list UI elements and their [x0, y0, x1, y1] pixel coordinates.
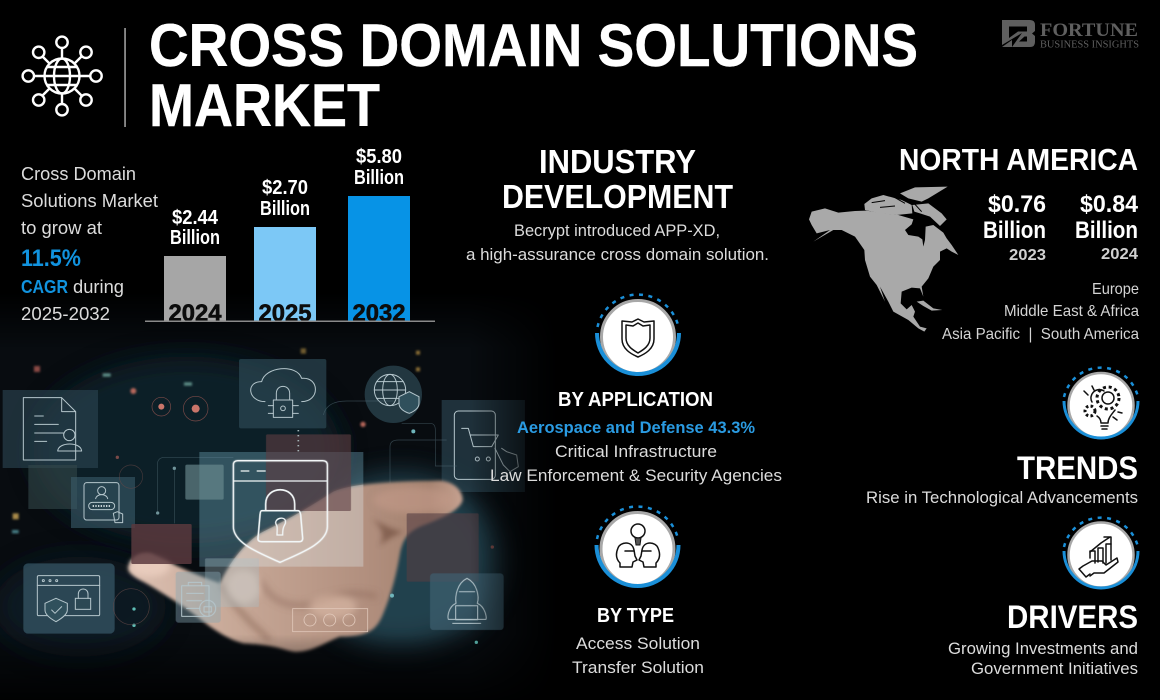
text block: by type: Transfer Solution: [572, 659, 704, 677]
heading: industry development: DEVELOPMENT: [502, 178, 733, 215]
heading: industry development: INDUSTRY: [539, 143, 696, 180]
bar 2025: $2.70: [262, 177, 308, 199]
header divider: [124, 28, 126, 127]
stat: 2023 value: 2023: [1009, 247, 1046, 264]
stat: 2024 value: $0.84: [1080, 191, 1139, 218]
bar 2025: 2025: [258, 300, 312, 327]
panel: browser shield lock: [23, 563, 115, 634]
panel: document: [3, 390, 98, 468]
stat: 2023 value: [983, 191, 1046, 264]
text block: by type: Access Solution: [576, 635, 700, 653]
text block: by application: [490, 389, 782, 485]
heading: north america: NORTH AMERICA: [899, 142, 1138, 177]
text block: other regions: [942, 281, 1139, 343]
heading: industry development: a high-assurance cross domain solution.: [466, 246, 769, 264]
bar 2024: Billion: [170, 227, 220, 249]
bar 2032: 2032: [352, 300, 406, 327]
panel: hacker: [430, 573, 504, 630]
text block: by type: BY TYPE: [597, 605, 674, 627]
title: MARKET: [149, 72, 380, 139]
bar 2024: [164, 207, 226, 327]
bar 2032: $5.80: [356, 146, 402, 168]
text block: trends: Rise in Technological Advancements: [866, 489, 1138, 507]
text block: by application: Critical Infrastructure: [555, 443, 717, 461]
stat: 2023 value: $0.76: [988, 191, 1046, 218]
panel: cloud lock: [239, 359, 326, 428]
text block: market growth: Cross Domain: [21, 163, 136, 184]
text block: trends: [866, 450, 1138, 507]
stat: 2023 value: Billion: [983, 217, 1046, 244]
text block: drivers: Growing Investments and: [948, 640, 1138, 658]
icon: drivers hand and chart: [1064, 518, 1138, 588]
panel: checklist lock: [176, 572, 221, 623]
translucent veil on hand: [229, 484, 364, 567]
text block: other regions: Middle East & Africa: [1004, 303, 1139, 320]
connector lines: [157, 401, 457, 523]
panel: mobile shopping: [442, 400, 525, 492]
logo: Fortune Business Insights: FORTUNE: [1040, 21, 1138, 41]
title: CROSS DOMAIN SOLUTIONS: [149, 12, 918, 79]
text block: other regions: Europe: [1092, 281, 1139, 298]
panel: globe shield: [365, 366, 422, 423]
icon: glowing shield with padlock: [233, 461, 327, 562]
text block: market growth: [21, 163, 158, 324]
panel: large translucent shield backing: [199, 452, 363, 567]
heading: industry development: [466, 143, 769, 264]
panel: power buttons: [293, 609, 368, 632]
indicator dots: [12, 348, 494, 644]
stat: 2024 value: Billion: [1075, 217, 1138, 244]
bar 2032: Billion: [354, 167, 404, 189]
icon: by type heads and bulb: [596, 507, 678, 586]
text block: market growth: 2025-2032: [21, 303, 110, 324]
bar chart: [145, 146, 435, 327]
logo: Fortune Business Insights: BUSINESS INSIGHTS: [1040, 40, 1139, 50]
bar 2025: [254, 177, 316, 327]
stat: 2024 value: [1075, 191, 1139, 263]
text block: market growth: to grow at: [21, 217, 102, 238]
text block: market growth: 11.5%: [21, 245, 81, 272]
map: North America: [809, 187, 958, 332]
text block: market growth: during: [73, 276, 124, 297]
bar 2032: [348, 146, 410, 327]
text block: drivers: Government Initiatives: [971, 660, 1138, 678]
heading: industry development: Becrypt introduced APP-XD,: [514, 222, 720, 240]
icon: application shield: [597, 295, 679, 374]
panel: password login: [71, 477, 135, 528]
photo: hand holding security shield: [0, 280, 1160, 700]
text block: market growth: Solutions Market: [21, 190, 158, 211]
logo: Fortune Business Insights: [1002, 20, 1139, 50]
text block: drivers: DRIVERS: [1007, 599, 1138, 635]
stat: 2024 value: 2024: [1101, 246, 1138, 263]
text block: drivers: [948, 599, 1138, 678]
text block: by type: [572, 605, 704, 677]
text block: other regions: Asia Pacific | South America: [942, 326, 1139, 343]
bar 2024: $2.44: [172, 207, 219, 229]
text block: by application: BY APPLICATION: [558, 389, 713, 411]
text block: by application: Aerospace and Defense 43.3%: [517, 419, 755, 437]
icon: trends bulb and gears: [1064, 368, 1138, 438]
bar 2025: Billion: [260, 198, 310, 220]
hand: [128, 481, 463, 652]
text block: by application: Law Enforcement & Security Agencies: [490, 467, 782, 485]
bar 2024: 2024: [168, 300, 222, 327]
text block: trends: TRENDS: [1017, 450, 1138, 486]
panel: maroon accent squares: [131, 434, 479, 582]
header icon: networked globe: [23, 37, 102, 115]
text block: market growth: CAGR: [21, 276, 68, 297]
